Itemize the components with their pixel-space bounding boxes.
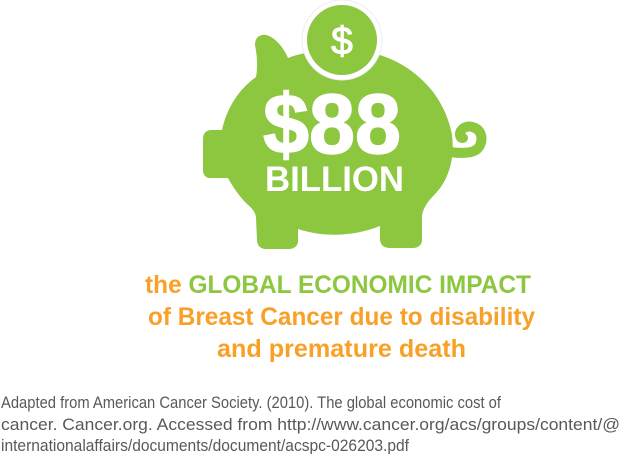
headline	[145, 271, 535, 363]
source citation	[1, 394, 620, 454]
headline line 1: the GLOBAL ECONOMIC IMPACT	[145, 271, 531, 299]
icon: coin: $	[331, 20, 353, 63]
headline line 3: and premature death	[217, 335, 466, 363]
headline line 2: of Breast Cancer due to disability	[148, 303, 535, 331]
citation line 2: cancer. Cancer.org. Accessed from http://www.cancer.org/acs/groups/content/@	[1, 416, 620, 434]
big number: $88	[263, 77, 401, 171]
icon: coin	[302, 0, 382, 80]
citation line 1: Adapted from American Cancer Society. (2010). The global economic cost of	[1, 394, 501, 412]
icon: pig body	[203, 35, 453, 249]
billion label: BILLION	[265, 160, 404, 199]
piggy bank illustration	[203, 0, 482, 249]
icon: pig tail	[449, 127, 482, 153]
